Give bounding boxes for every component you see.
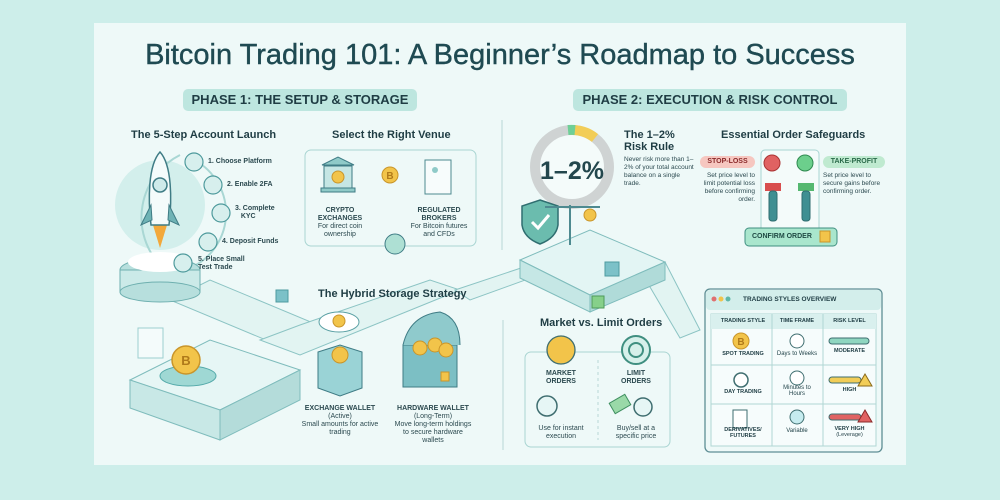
table text: TRADING STYLES OVERVIEW: [743, 296, 836, 303]
market/limit labels: MARKET: [546, 370, 576, 377]
path walkways: [170, 255, 700, 355]
steps list: KYC: [241, 213, 256, 220]
table text: HIGH: [843, 387, 856, 393]
phase 2 pill: PHASE 2: EXECUTION & RISK CONTROL: [583, 92, 837, 107]
heading: venue: Select the Right Venue: [332, 129, 451, 141]
take profit: [823, 156, 885, 195]
table text: Minutes to: [783, 385, 811, 391]
text: For Bitcoin futures and CFDs: [411, 223, 467, 238]
table text: DERIVATIVES/: [724, 427, 762, 433]
table text: [720, 296, 866, 439]
table text: TIME FRAME: [780, 318, 814, 324]
risk rule text: Risk Rule: [624, 141, 674, 153]
risk rule text: The 1–2%: [624, 129, 675, 141]
rocket group: [115, 152, 226, 302]
table text: MODERATE: [834, 348, 865, 354]
phase 1 pill: PHASE 1: THE SETUP & STORAGE: [192, 92, 408, 107]
heading: safeguards: Essential Order Safeguards: [721, 129, 865, 141]
table text: TRADING STYLE: [721, 318, 765, 324]
order safeguard panel: [745, 150, 837, 246]
stop loss: Set price level to limit potential loss before confirming order.: [704, 172, 755, 203]
text: LIMIT: [627, 370, 645, 377]
text: BROKERS: [421, 215, 456, 222]
steps list: 3. Complete: [235, 205, 275, 212]
steps list: Test Trade: [198, 264, 232, 271]
venue text: [318, 207, 362, 238]
title: Bitcoin Trading 101: A Beginner’s Roadmap to Success: [145, 39, 855, 71]
illustrations: B: [386, 171, 394, 182]
table text: VERY HIGH: [835, 426, 864, 432]
steps list: 1. Choose Platform: [208, 158, 272, 165]
steps list: 2. Enable 2FA: [227, 181, 273, 188]
table text: FUTURES: [730, 433, 756, 439]
venue box: [305, 150, 476, 246]
background card: [94, 23, 906, 465]
table text: (Leverage): [836, 432, 863, 438]
table text: Hours: [789, 391, 805, 397]
stop loss: [700, 156, 755, 203]
take profit: Set price level to secure gains before confirming order.: [823, 172, 880, 195]
steps list: 5. Place Small: [198, 256, 245, 263]
storage labels: EXCHANGE WALLET: [305, 405, 375, 412]
venue text: For direct coin ownership: [318, 223, 362, 238]
table panel: [705, 289, 882, 452]
risk rule text: [624, 129, 694, 187]
storage labels: Small amounts for active trading: [302, 421, 378, 436]
confirm button text: CONFIRM ORDER: [752, 233, 812, 240]
market/limit box: [525, 352, 670, 447]
take profit: TAKE-PROFIT: [831, 158, 877, 165]
venue text: EXCHANGES: [318, 215, 362, 222]
divider: [501, 120, 503, 250]
phase 1 pill: [183, 89, 417, 111]
bottom coin platform: [130, 290, 300, 440]
heading: hybrid storage: The Hybrid Storage Strategy: [318, 288, 467, 300]
stop loss: STOP-LOSS: [707, 158, 748, 165]
bottom coin platform: B: [181, 353, 191, 368]
text: REGULATED: [417, 207, 461, 214]
market/limit labels: ORDERS: [546, 378, 576, 385]
table text: RISK LEVEL: [833, 318, 866, 324]
heading: 5-step launch: The 5-Step Account Launch: [131, 129, 276, 141]
risk rule text: Never risk more than 1–2% of your total account balance on a single trade.: [624, 156, 694, 187]
heading: market vs limit: Market vs. Limit Orders: [540, 317, 662, 329]
table panel: B: [737, 337, 745, 348]
text: Buy/sell at a specific price: [616, 425, 656, 440]
storage labels: [302, 405, 378, 436]
text: Use for instant execution: [538, 425, 584, 440]
phase 2 pill: [573, 89, 847, 111]
text: (Long-Term): [414, 413, 452, 420]
table text: Days to Weeks: [777, 351, 817, 357]
text: Move long-term holdings to secure hardware wallets: [395, 421, 471, 444]
steps list: 4. Deposit Funds: [222, 238, 278, 245]
storage icons: [318, 312, 460, 396]
risk donut & platform: [520, 130, 665, 312]
text: ORDERS: [621, 378, 651, 385]
table text: SPOT TRADING: [722, 351, 764, 357]
venue text: CRYPTO: [326, 207, 354, 214]
table text: Variable: [786, 428, 808, 434]
table text: DAY TRADING: [724, 389, 762, 395]
storage labels: (Active): [328, 413, 352, 420]
step icons: [174, 153, 230, 272]
market/limit labels: [546, 370, 576, 385]
text: HARDWARE WALLET: [397, 405, 469, 412]
steps list: [198, 158, 278, 271]
risk donut & platform: 1–2%: [540, 157, 604, 185]
